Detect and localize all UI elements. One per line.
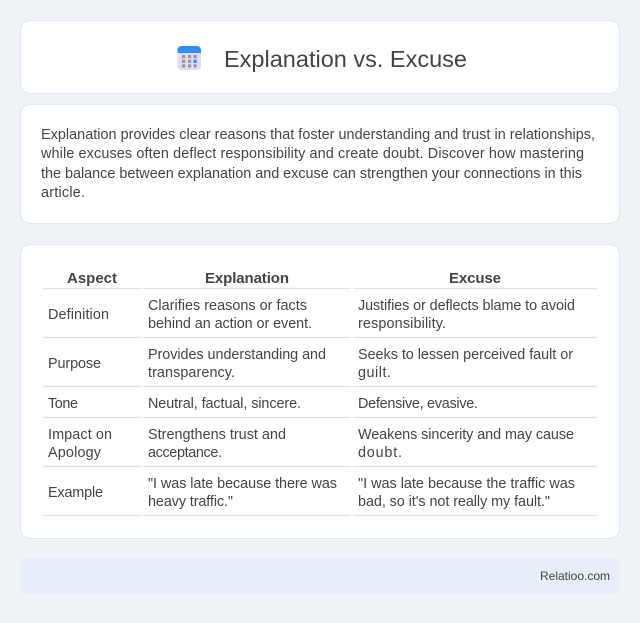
row: definition: responsibility. bbox=[358, 316, 446, 332]
row: purpose: transparency. bbox=[148, 365, 235, 381]
title: Explanation vs. Excuse bbox=[224, 46, 467, 72]
footer bar bbox=[20, 559, 620, 593]
intro paragraph: Explanation provides clear reasons that foster understanding and trust in relationships, bbox=[41, 127, 595, 143]
row: example: Example bbox=[48, 485, 103, 501]
row: definition: behind an action or event. bbox=[148, 316, 312, 332]
row: example: bad, so it's not really my fault." bbox=[358, 494, 550, 510]
row: impact on apology: Apology bbox=[48, 445, 102, 461]
intro paragraph bbox=[40, 127, 595, 201]
table header row bbox=[67, 270, 501, 287]
intro paragraph: the balance between explanation and excuse can strengthen your connections in this bbox=[41, 166, 582, 182]
row: tone bbox=[48, 396, 478, 412]
table header row: Explanation bbox=[205, 270, 289, 287]
row: purpose: Purpose bbox=[48, 356, 101, 372]
row: tone: Tone bbox=[48, 396, 78, 412]
row: purpose: Seeks to lessen perceived fault or bbox=[358, 347, 573, 363]
panel: comparison table bbox=[20, 244, 620, 538]
row: tone: Defensive, evasive. bbox=[358, 396, 478, 412]
row: impact on apology: doubt. bbox=[358, 445, 402, 461]
row: definition bbox=[48, 298, 575, 332]
row: purpose: guilt. bbox=[358, 365, 391, 381]
table header row: Aspect bbox=[67, 270, 117, 287]
panel: introduction bbox=[20, 104, 620, 224]
row: impact on apology: Strengthens trust and bbox=[148, 427, 286, 443]
intro paragraph: while excuses often deflect responsibility and create doubt. Discover how mastering bbox=[40, 146, 584, 162]
row: example: heavy traffic." bbox=[148, 494, 233, 510]
intro paragraph: article. bbox=[41, 185, 85, 201]
row: definition: Justifies or deflects blame to avoid bbox=[358, 298, 575, 314]
icon: calendar bbox=[178, 46, 201, 70]
row: purpose bbox=[48, 347, 573, 381]
row: tone: Neutral, factual, sincere. bbox=[148, 396, 301, 412]
row: definition: Definition bbox=[48, 307, 109, 323]
panel: title header bbox=[20, 20, 620, 94]
row: impact on apology: Weakens sincerity and may cause bbox=[358, 427, 574, 443]
row: impact on apology bbox=[48, 427, 574, 461]
row: impact on apology: Impact on bbox=[48, 427, 112, 443]
row: purpose: Provides understanding and bbox=[148, 347, 326, 363]
table header row: Excuse bbox=[449, 270, 501, 287]
row: example: "I was late because the traffic was bbox=[358, 476, 575, 492]
row: definition: Clarifies reasons or facts bbox=[148, 298, 307, 314]
footer credit: Relatioo.com bbox=[540, 569, 610, 583]
row: example: "I was late because there was bbox=[148, 476, 337, 492]
row: example bbox=[48, 476, 575, 510]
row: impact on apology: acceptance. bbox=[148, 445, 222, 461]
